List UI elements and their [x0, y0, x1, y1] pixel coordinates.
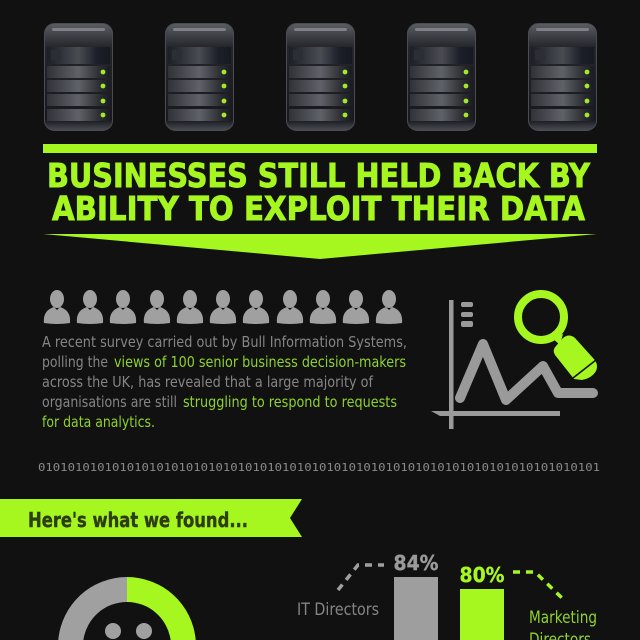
bar: Marketing Directors 80%: 80%: [460, 563, 504, 587]
label: IT Directors: IT Directors: [297, 600, 379, 619]
donut chart: [58, 577, 196, 640]
title: [47, 156, 591, 228]
dashed connector: Marketing Directors: [513, 572, 562, 598]
banner: here's what we found: [0, 499, 302, 537]
survey text block: organisations are still: [42, 393, 177, 411]
label: Marketing Directors: [529, 608, 597, 640]
survey text block: across the UK, has revealed that a large majority of: [42, 373, 373, 391]
banner: here's what we found: Here's what we found...: [28, 508, 248, 532]
binary code strip: 0101010101010101010101010101010101010101010101010101010101010101010101010101: [38, 461, 600, 474]
arrow: title pointer: [43, 234, 597, 259]
survey text block: struggling to respond to requests: [183, 393, 397, 411]
survey text block: for data analytics.: [42, 413, 155, 431]
icon: row of people: [44, 290, 402, 324]
survey text block: views of 100 senior business decision-makers: [114, 353, 406, 371]
bar: IT Directors 84%: 84%: [394, 551, 438, 575]
title: ABILITY TO EXPLOIT THEIR DATA: [52, 189, 585, 228]
icon: line chart with magnifying glass: [431, 294, 597, 429]
survey text block: A recent survey carried out by Bull Information Systems,: [42, 333, 407, 351]
dashed connector: IT Directors: [338, 565, 384, 590]
bar: IT Directors 84%: [394, 551, 438, 640]
icon: row of server racks: [44, 24, 596, 130]
title top bar: [43, 144, 597, 153]
survey text block: [42, 333, 407, 431]
bar: Marketing Directors 80%: [460, 563, 504, 640]
survey text block: polling the: [42, 353, 108, 371]
label: Marketing Directors: Marketing: [529, 608, 597, 627]
